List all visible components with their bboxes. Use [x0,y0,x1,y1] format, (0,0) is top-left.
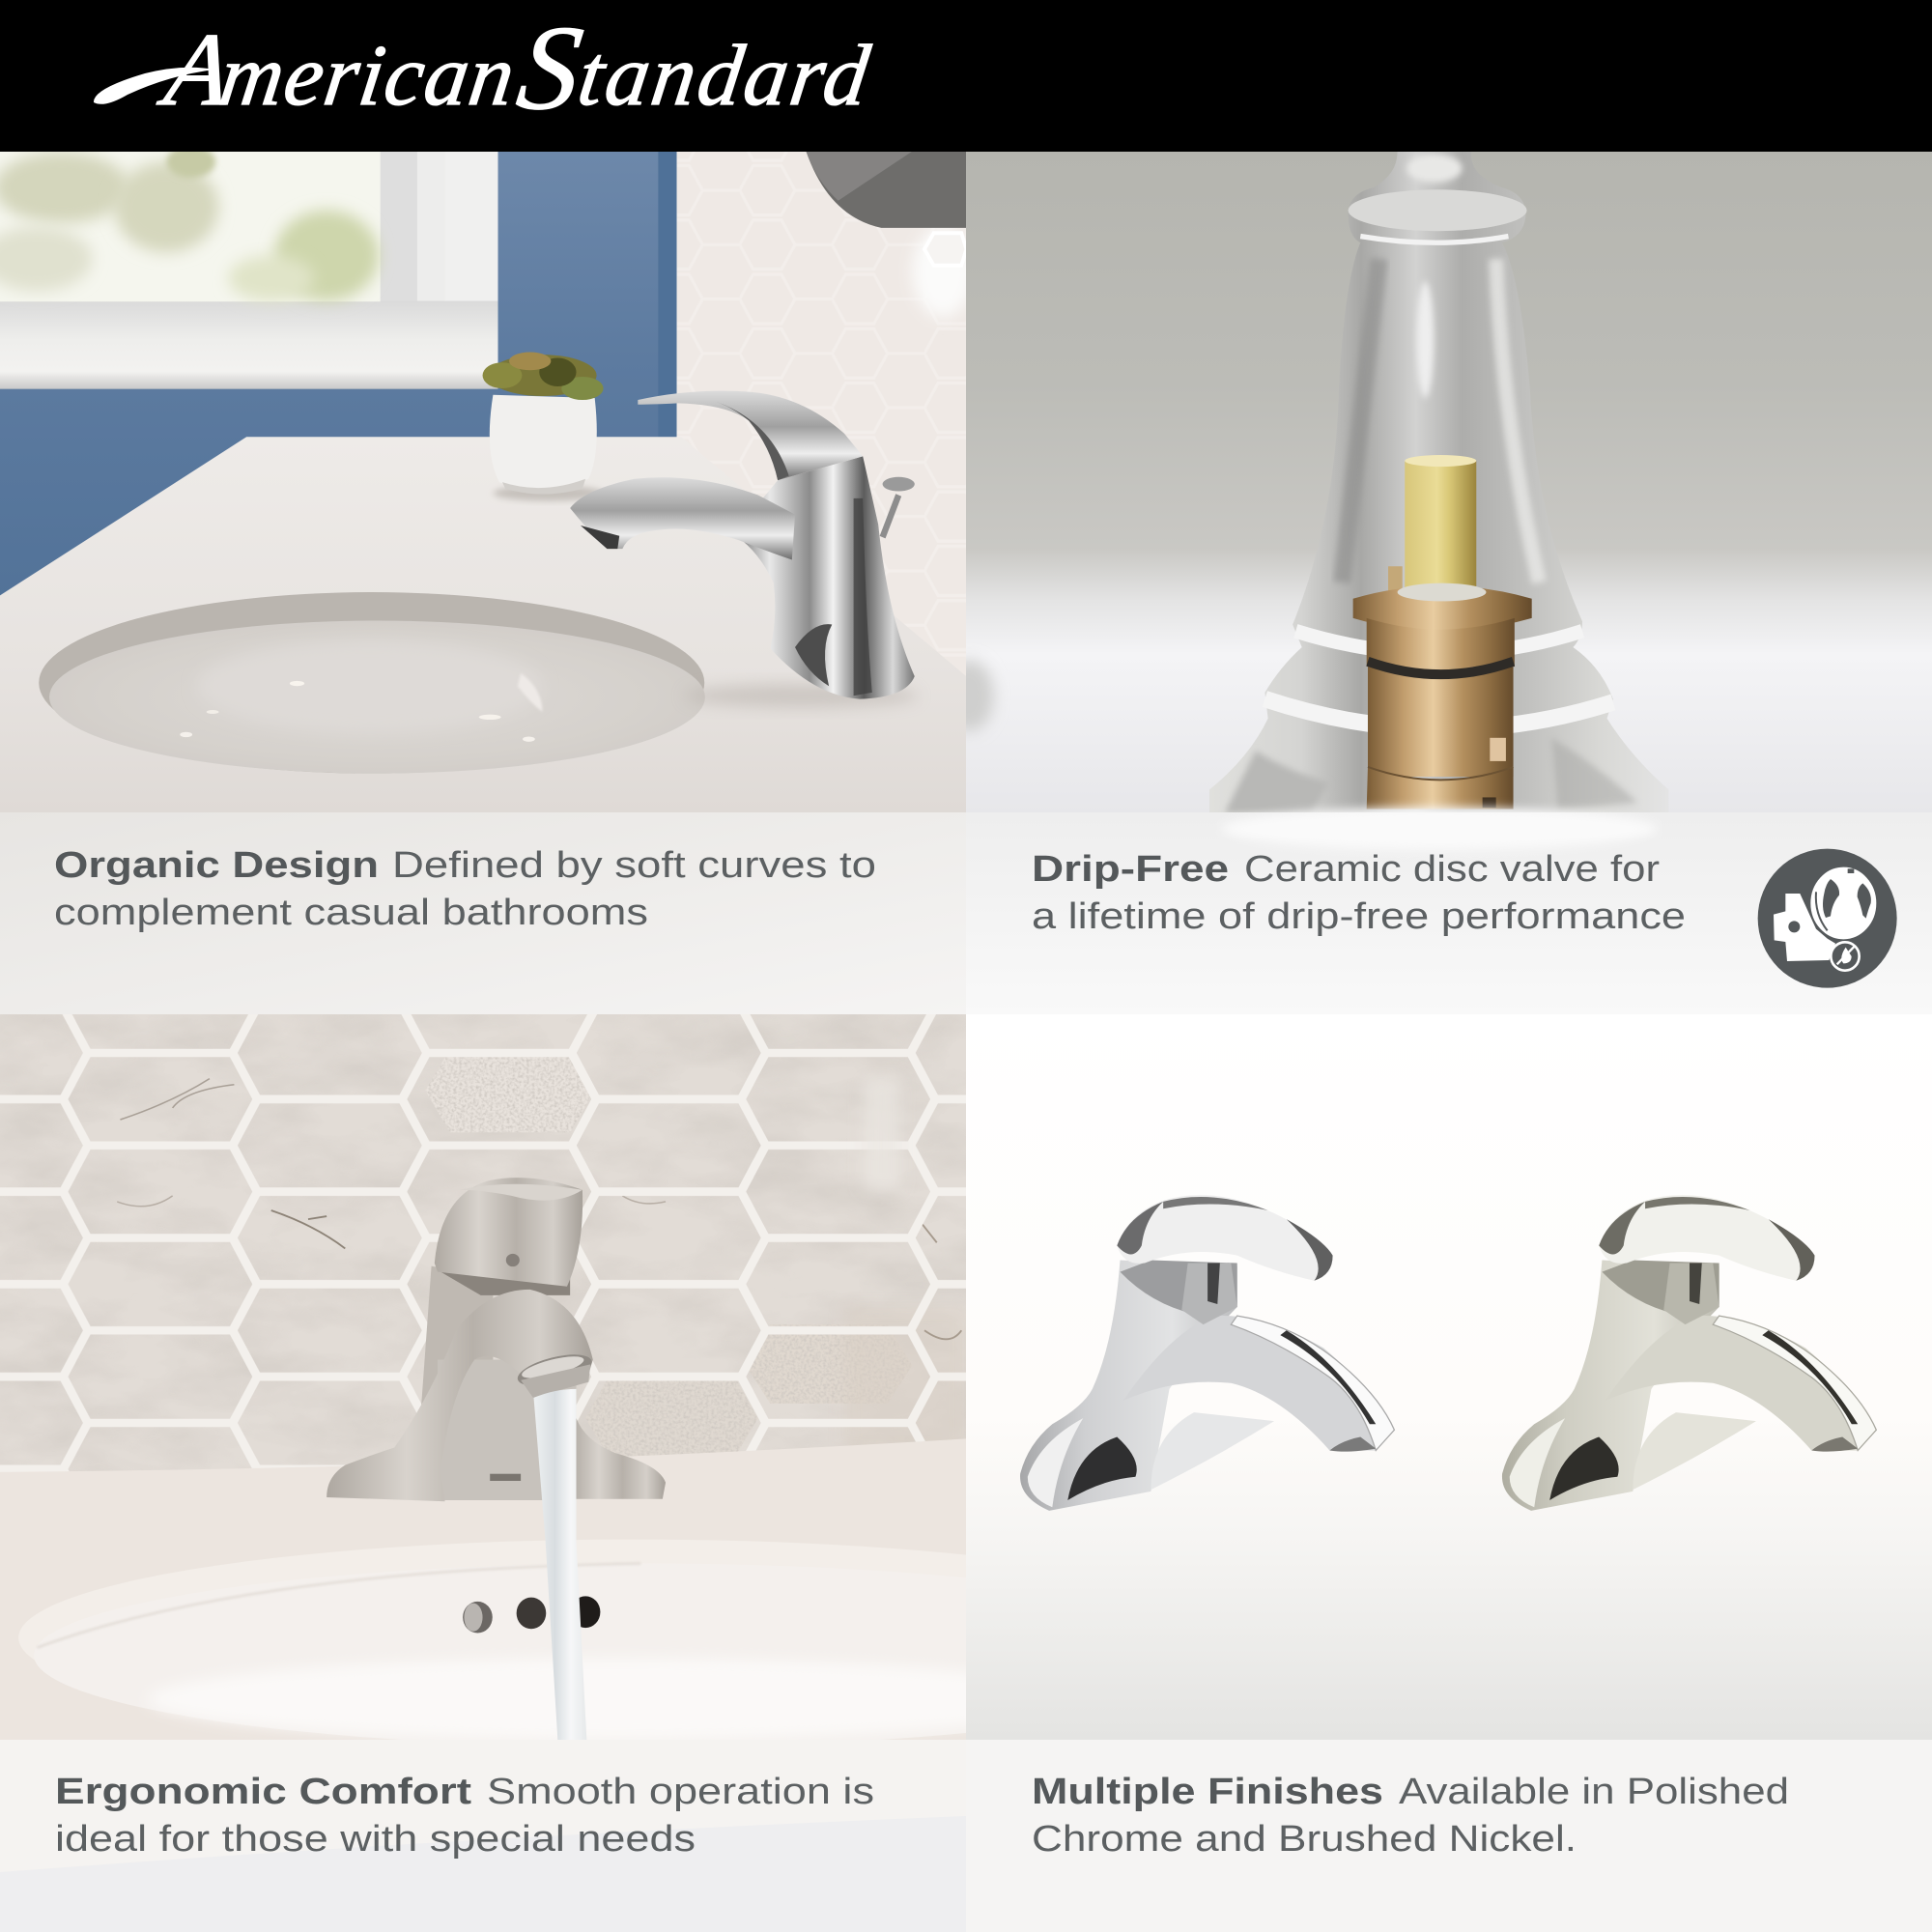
caption: ergonomic comfort: Smooth operation is [487,1772,874,1812]
brushed nickel faucet [327,1178,666,1501]
dark fixture top right [807,152,966,228]
caption: ergonomic comfort [55,1772,874,1860]
water stream [534,1389,586,1740]
sink [19,1540,966,1740]
caption: organic design: Organic Design [54,845,379,886]
tile wall [677,152,974,701]
faucet: polished chrome [1020,1195,1394,1511]
caption: drip-free: Drip-Free [1032,849,1229,890]
caption: ergonomic comfort: Ergonomic Comfort [55,1772,471,1812]
logo: American Standard: S [510,2,589,135]
window frame [0,152,498,389]
caption: multiple finishes: Chrome and Brushed Nickel. [1032,1819,1577,1860]
pot with succulent [483,352,604,501]
caption: organic design: complement casual bathrooms [54,893,648,933]
panel: organic design [0,146,974,1014]
chrome faucet [570,391,915,699]
faucet: brushed nickel [1502,1195,1876,1511]
panel: multiple finishes [966,1014,1932,1932]
panel: ergonomic comfort [0,1014,966,1932]
caption: organic design [54,845,876,933]
icon: ceramic disc valve, no drip [1758,849,1897,988]
logo: American Standard: A [153,12,240,128]
window view with foliage [0,146,381,301]
countertop [0,437,966,813]
panel: drip-free [945,152,1932,1014]
caption band [966,812,1932,1014]
caption: multiple finishes [1032,1772,1789,1860]
caption: drip-free: Ceramic disc valve for [1244,849,1660,890]
header bar with logo [0,0,1932,152]
chrome bell escutcheon [1209,152,1668,813]
overflow holes [463,1596,600,1634]
caption: multiple finishes: Multiple Finishes [1032,1772,1383,1812]
caption band [966,1740,1932,1932]
marble hexagon tile wall [0,1014,966,1483]
brass cartridge [1353,455,1532,810]
caption band [0,812,966,1014]
countertop [0,1438,966,1740]
blue wall [0,152,659,595]
caption: drip-free: a lifetime of drip-free performance [1032,896,1686,937]
caption: multiple finishes: Available in Polished [1399,1772,1789,1812]
caption: drip-free [1032,849,1686,937]
logo: American Standard [94,2,881,135]
sink [39,592,705,774]
caption: organic design: Defined by soft curves to [392,845,876,886]
caption band [0,1740,966,1932]
logo: American Standard: merican [214,26,522,124]
caption: ergonomic comfort: ideal for those with special needs [55,1819,696,1860]
logo: American Standard: tandard [573,26,877,124]
faucet shadow [684,684,919,707]
